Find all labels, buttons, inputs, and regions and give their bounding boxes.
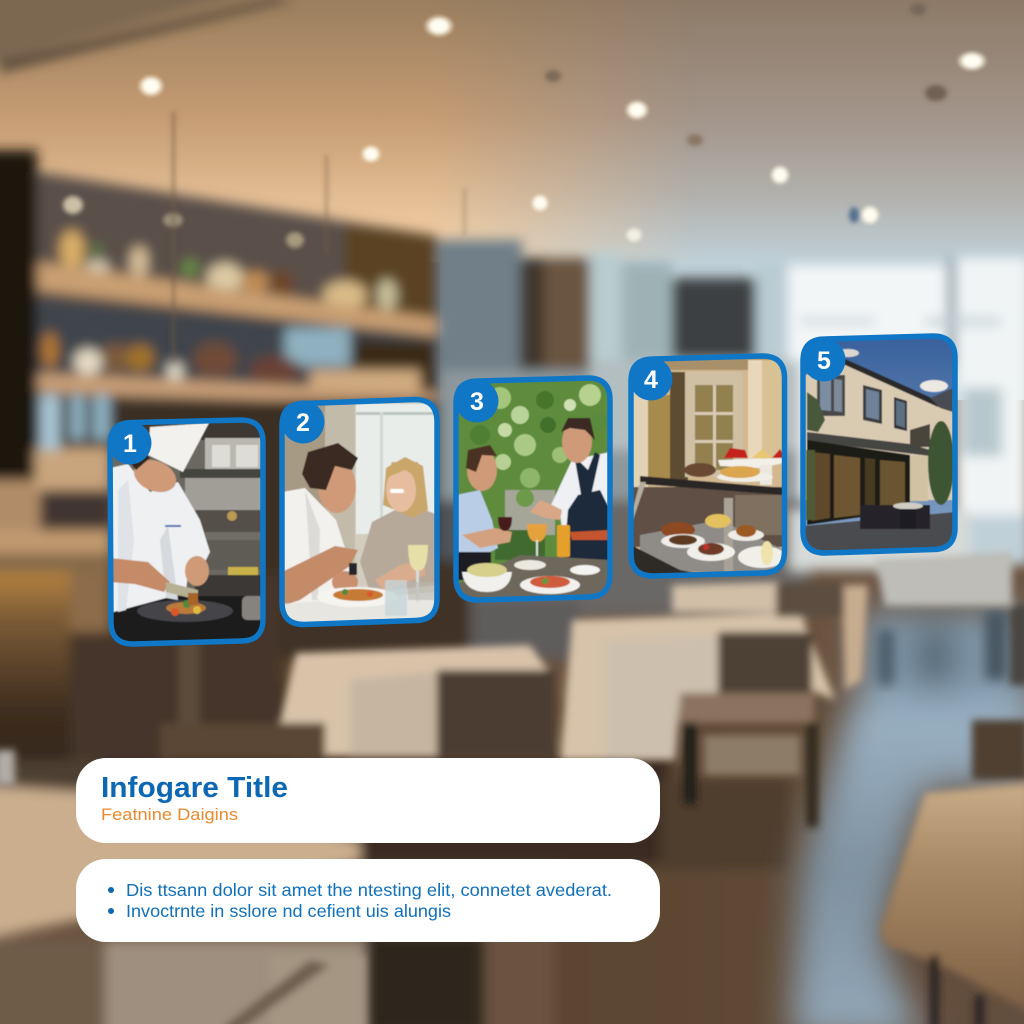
photo: chef	[112, 423, 260, 642]
bullet two: Invoctrnte in sslore nd cefient uis alungis	[126, 901, 451, 921]
floor	[555, 700, 1024, 1024]
table A	[272, 645, 548, 757]
subtitle: Featnine Daigins	[101, 805, 238, 824]
panel: title	[76, 758, 660, 843]
shelving wall	[0, 150, 437, 420]
badge 2: 2	[296, 409, 310, 437]
photo: dessert stand	[634, 358, 782, 574]
photo: diners	[284, 402, 434, 622]
frame	[456, 378, 610, 600]
card 5: restaurant exterior	[798, 330, 960, 558]
chairs	[437, 670, 555, 757]
bullet one: Dis ttsann dolor sit amet the ntesting elit, connetet avederat.	[126, 880, 612, 900]
card 4: dessert buffet	[625, 350, 790, 585]
left lower wall	[0, 480, 110, 575]
table C	[880, 783, 1024, 1012]
badge 3: 3	[470, 388, 484, 416]
badge 5	[802, 338, 846, 382]
panel: bullet list	[76, 859, 660, 942]
center and window wall	[438, 240, 522, 375]
frame	[631, 356, 784, 576]
badge 1: 1	[123, 430, 137, 458]
photo: building and patio	[806, 338, 952, 550]
table B	[560, 612, 835, 760]
photo: waiter and guest	[458, 380, 608, 597]
card 3: waiter serving on the terrace	[450, 372, 615, 607]
frame	[110, 420, 263, 644]
badge 5: 5	[817, 347, 831, 375]
badge 4: 4	[644, 366, 658, 394]
card 2: couple dining	[275, 395, 445, 630]
badge 4	[630, 358, 672, 400]
badge 1	[108, 422, 152, 464]
badge 2	[282, 400, 324, 444]
badge 3	[456, 380, 498, 422]
heading: Infogare Title	[101, 772, 288, 804]
far table right	[875, 552, 1012, 606]
table far centre	[672, 582, 780, 612]
card 1: chef plating	[105, 415, 270, 651]
frame	[803, 336, 955, 553]
frame	[282, 400, 437, 624]
